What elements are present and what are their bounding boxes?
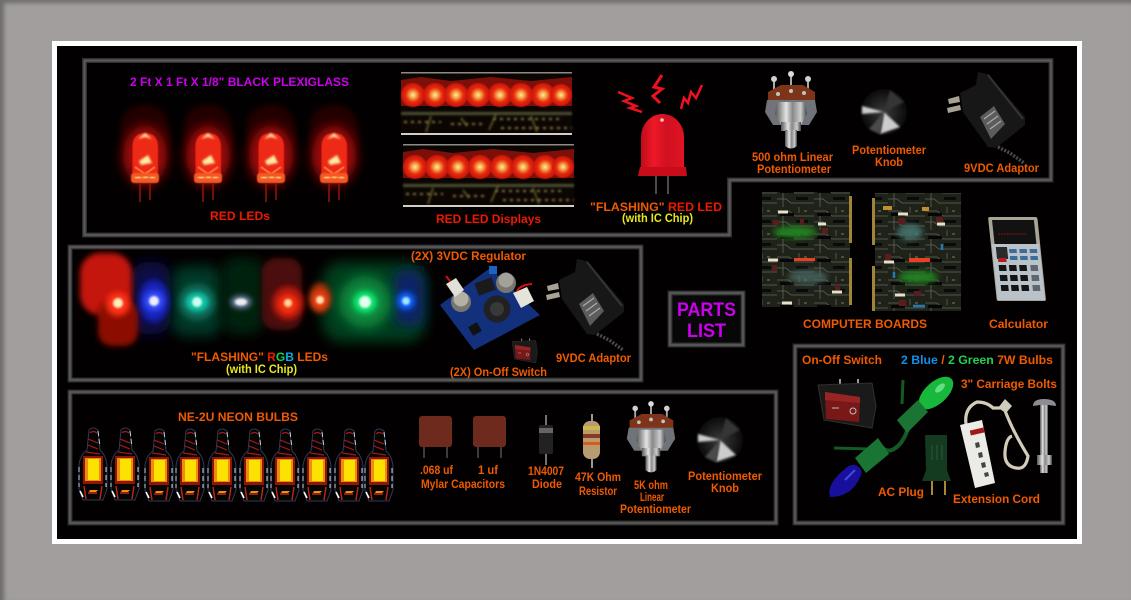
label: resistor (575, 470, 621, 498)
icon: mylar capacitors (419, 416, 506, 458)
label: flashing red LED: "FLASHING" RED LED (590, 200, 722, 214)
image: red LED display 2 (403, 144, 574, 207)
label: red LED displays: RED LED Displays (436, 212, 541, 226)
label: potentiometer knob: Potentiometer (852, 143, 926, 157)
image: computer boards (762, 192, 961, 311)
icon: calculator (988, 217, 1046, 301)
panel: parts list title (670, 293, 743, 345)
label: on-off switch: On-Off Switch (802, 353, 882, 367)
label: 9VDC adaptor: 9VDC Adaptor (556, 351, 631, 365)
icon: small on-off switch (512, 338, 538, 363)
icon: potentiometer knob (861, 89, 907, 135)
label: 9VDC adaptor: 9VDC Adaptor (964, 161, 1039, 175)
label: capacitor values: .068 uf (420, 463, 454, 477)
icon: 47K resistor (583, 414, 600, 468)
label: diode: 1N4007 (528, 464, 564, 478)
outer white frame (54, 44, 1080, 542)
label: calculator: Calculator (989, 317, 1048, 331)
label: computer boards: COMPUTER BOARDS (803, 317, 927, 331)
image: RGB LED glow (80, 253, 426, 346)
label: 5K potentiometer: Linear (640, 490, 664, 504)
label: capacitor values: Mylar Capacitors (421, 477, 505, 491)
panel: red LEDs, displays and top parts (84, 60, 1051, 235)
label: diode (528, 464, 564, 491)
label: with IC chip: (with IC Chip) (622, 211, 693, 225)
label: resistor: Resistor (579, 484, 617, 498)
label: diode: Diode (532, 477, 562, 491)
icon: AC plug (922, 435, 951, 495)
icon: 9VDC adaptor (947, 72, 1025, 163)
icon: 5K potentiometer (627, 401, 675, 472)
label: extension cord: Extension Cord (953, 492, 1040, 506)
label: 500 ohm linear potentiometer (752, 150, 833, 176)
label: 5K potentiometer: Potentiometer (620, 502, 691, 516)
panel: flashing RGB LEDs (70, 247, 641, 380)
title: parts list: PARTS (677, 300, 736, 321)
icon: green and blue bulbs on wire (829, 371, 959, 497)
title: parts list: LIST (687, 321, 726, 342)
label: 3VDC regulator: (2X) 3VDC Regulator (411, 249, 526, 263)
icon: 3VDC regulator board (440, 266, 540, 350)
label: carriage bolts: 3" Carriage Bolts (961, 377, 1057, 391)
label: capacitor values: 1 uf (478, 463, 499, 477)
label: 5K potentiometer (620, 478, 691, 516)
board right (872, 193, 961, 311)
icon: 9VDC adaptor (546, 259, 624, 350)
label: AC plug: AC Plug (878, 485, 924, 499)
label: potentiometer knob (688, 469, 762, 495)
icon: flashing red LED with sparks (618, 75, 702, 194)
heading: neon bulbs: NE-2U NEON BULBS (178, 410, 298, 424)
label: potentiometer knob (852, 143, 926, 169)
icon: potentiometer knob (697, 417, 743, 463)
icons: four red LEDs (120, 104, 359, 202)
label: resistor: 47K Ohm (575, 470, 621, 484)
label: red LEDs: RED LEDs (210, 209, 270, 223)
label: 500 ohm linear potentiometer: 500 ohm Linear (752, 150, 833, 164)
label: potentiometer knob: Knob (875, 155, 903, 169)
label: capacitor values (420, 463, 505, 491)
label: on-off switch: (2X) On-Off Switch (450, 365, 547, 379)
panel: neon bulb circuit parts (70, 392, 776, 523)
icon: 500 ohm potentiometer (765, 71, 817, 148)
icon: 1N4007 diode (539, 415, 553, 465)
board left (762, 192, 852, 307)
label: bulbs: 2 Blue / 2 Green 7W Bulbs (901, 353, 1053, 367)
label: potentiometer knob: Knob (711, 481, 739, 495)
label: with IC chip: (with IC Chip) (226, 362, 297, 376)
panel: bulbs, switch and hardware (795, 346, 1063, 523)
image: red LED display 1 (401, 72, 572, 135)
label: flashing RGB LEDs: "FLASHING" RGB LEDs (191, 350, 328, 364)
label: 500 ohm linear potentiometer: Potentiometer (757, 162, 831, 176)
icons: ten neon bulbs (79, 428, 393, 501)
icon: rocker switch (818, 379, 876, 428)
label: 5K potentiometer: 5K ohm (634, 478, 668, 492)
title: parts list (677, 300, 736, 342)
heading: black plexiglass: 2 Ft X 1 Ft X 1/8" BLACK PLEXIGLASS (130, 75, 349, 89)
icon: extension cord (960, 399, 1028, 488)
icon: carriage bolt (1033, 399, 1056, 473)
label: potentiometer knob: Potentiometer (688, 469, 762, 483)
